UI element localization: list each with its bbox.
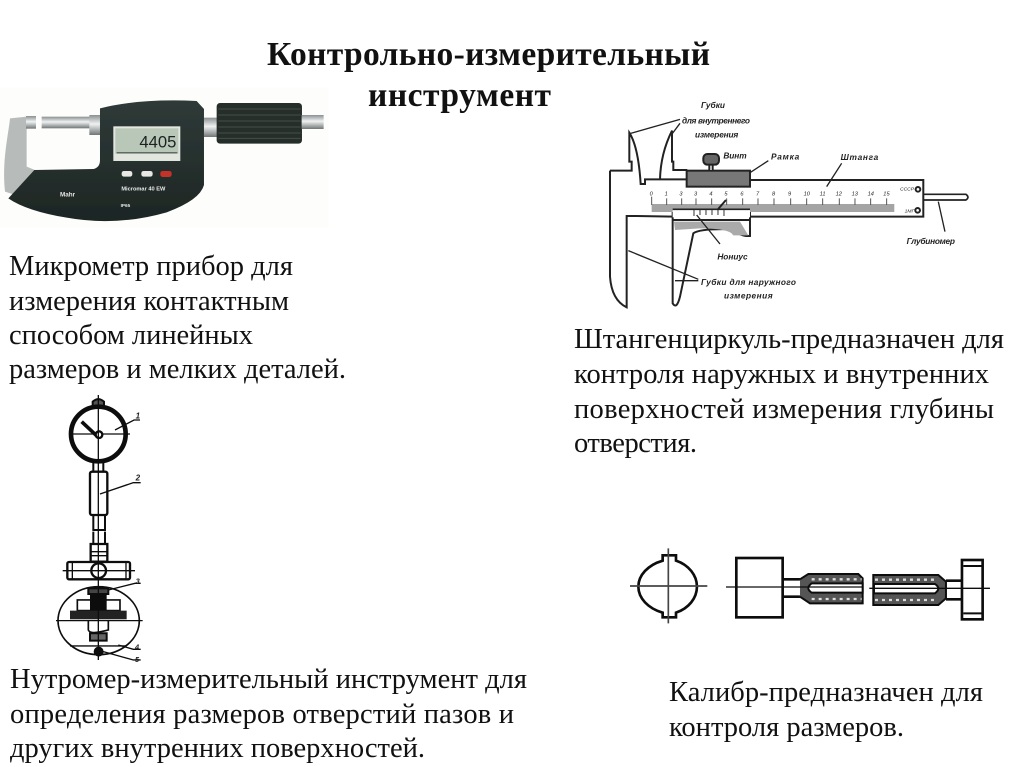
caliper labels: Штанга (841, 152, 879, 162)
caliper labels: измерения (695, 129, 738, 139)
text: micrometer description (9, 251, 346, 385)
text: bore gauge description (10, 664, 527, 764)
text: plug gauge description: контроля размеров. (669, 712, 904, 743)
gauge right part (873, 560, 983, 619)
icon: vernier caliper diagram: 6 (740, 191, 744, 197)
caliper labels: для внутреннего (682, 115, 750, 125)
text: caliper description: контроля наружных и внутренних (574, 359, 989, 390)
icon: digital micrometer photo (0, 88, 328, 228)
caliper labels: измерения (724, 290, 773, 300)
icon: bore gauge diagram: 3 (136, 576, 140, 585)
leader lines and numbers (100, 420, 141, 660)
title (267, 36, 710, 114)
text: bore gauge description: Нутромер-измерительный инструмент для (10, 664, 527, 695)
icon: vernier caliper diagram: 7 (756, 191, 760, 197)
LCD display: 4405 (139, 132, 176, 151)
caliper labels (682, 100, 955, 300)
icon: vernier caliper diagram: 4 (709, 191, 712, 197)
icon: plug gauge diagram (630, 548, 990, 623)
text: bore gauge description: определения размеров отверстий пазов и (10, 699, 514, 730)
text: bore gauge description: других внутренних поверхностей. (10, 733, 425, 764)
caliper labels: Губки для наружного (701, 277, 796, 287)
icon: digital micrometer photo: Mahr (60, 192, 76, 199)
caliper labels: Глубиномер (907, 236, 955, 246)
icon: vernier caliper diagram: СССР (900, 187, 915, 193)
text: caliper description: Штангенциркуль-предназначен для (574, 324, 1004, 355)
text: micrometer description: измерения контактным (9, 286, 289, 317)
caliper labels: Губки (701, 100, 725, 110)
icon: bore gauge diagram (56, 395, 143, 664)
text: caliper description: поверхностей измерения глубины (574, 394, 994, 425)
cross member (63, 562, 135, 579)
LCD display (113, 126, 180, 161)
text: micrometer description: размеров и мелких деталей. (9, 354, 346, 385)
icon: vernier caliper diagram: 3 (694, 191, 698, 197)
icon: vernier caliper diagram: 3 (679, 191, 683, 197)
text: caliper description (574, 324, 1004, 459)
icon: vernier caliper diagram: 8 (772, 191, 776, 197)
text: micrometer description: способом линейных (9, 320, 253, 351)
icon: vernier caliper diagram: 5 (724, 191, 728, 197)
icon: vernier caliper diagram: 14 (868, 191, 874, 197)
text: plug gauge description (669, 677, 983, 743)
lower measuring head (56, 587, 143, 656)
icon: vernier caliper diagram: 12 (836, 191, 843, 197)
icon: vernier caliper diagram: 15 (883, 191, 890, 197)
icon: bore gauge diagram: 1 (136, 411, 141, 420)
icon: vernier caliper diagram: 9 (788, 191, 792, 197)
text: caliper description: отверстия. (574, 428, 697, 459)
gauge left part (736, 558, 863, 617)
icon: bore gauge diagram: 2 (135, 474, 141, 483)
text: plug gauge description: Калибр-предназначен для (669, 677, 983, 708)
icon: vernier caliper diagram: 1МГ (905, 209, 916, 215)
icon: digital micrometer photo: IP65 (121, 203, 131, 208)
dial head (70, 399, 130, 461)
screw (709, 164, 713, 170)
main beam and jaws (610, 133, 687, 184)
depth gauge (923, 194, 968, 200)
icon: bore gauge diagram: 4 (134, 642, 139, 651)
icon: vernier caliper diagram: 1 (665, 191, 668, 197)
icon: digital micrometer photo: Micromar 40 EW (121, 187, 166, 193)
icon: vernier caliper diagram: 11 (820, 191, 826, 197)
icon: bore gauge diagram: 5 (135, 655, 140, 664)
cross-section view (630, 548, 707, 623)
title: инструмент (368, 77, 552, 114)
icon: vernier caliper diagram: 13 (852, 191, 859, 197)
caliper labels: Рамка (771, 151, 800, 161)
stem and handle (90, 461, 107, 562)
title: Контрольно-измерительный (267, 36, 710, 73)
leader lines (628, 119, 945, 281)
icon: vernier caliper diagram: 10 (804, 191, 811, 197)
icon: vernier caliper diagram: 0 (650, 191, 654, 197)
caliper labels: Нониус (717, 251, 748, 261)
scale (652, 204, 894, 212)
text: micrometer description: Микрометр прибор для (9, 251, 293, 282)
caliper labels: Винт (723, 151, 747, 161)
icon: vernier caliper diagram (610, 100, 968, 307)
